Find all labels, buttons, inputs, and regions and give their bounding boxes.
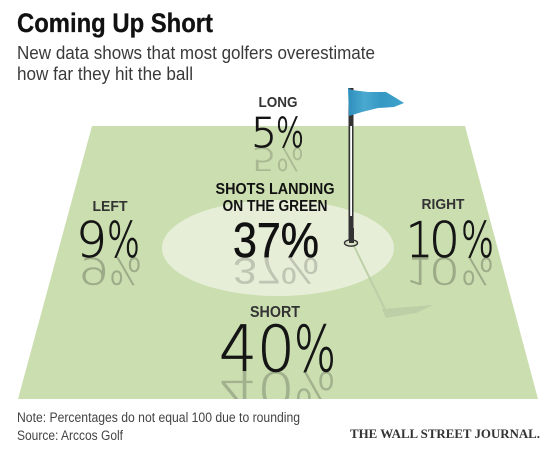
footnote: Note: Percentages do not equal 100 due to rounding [17, 410, 300, 425]
flag shadow [353, 246, 433, 318]
central green ellipse [162, 200, 394, 296]
label: left: 9 [76, 212, 107, 269]
title: Coming Up Short [17, 8, 213, 38]
icon: flag and pin [344, 88, 404, 246]
label: long: LONG [258, 94, 298, 111]
subtitle [17, 42, 375, 84]
label: right [406, 196, 494, 291]
label: right: % [461, 212, 494, 269]
label: shots landing on the green: 37% [233, 214, 319, 268]
footnote [17, 410, 300, 443]
label: long: 5 [251, 140, 277, 177]
label: shots landing on the green: ON THE GREEN [222, 198, 328, 215]
label: right: RIGHT [422, 196, 464, 213]
label: short: 40 [219, 360, 295, 415]
subtitle: how far they hit the ball [17, 63, 193, 84]
label: right: % [461, 249, 494, 291]
label: right: 1 [406, 249, 433, 291]
label: left: LEFT [92, 198, 128, 215]
panel: putting green [18, 126, 538, 399]
label: right: 1 [406, 212, 433, 269]
label: long: % [276, 109, 304, 157]
label: long: % [276, 140, 304, 177]
label: left: % [107, 212, 140, 269]
label: long [251, 94, 304, 177]
label: left [76, 198, 142, 291]
label: right: 0 [429, 212, 460, 269]
label: shots landing on the green: 37% [233, 250, 319, 290]
label: shots landing on the green [216, 181, 334, 290]
label: short: 40 [219, 313, 295, 386]
label: left: 9 [78, 249, 109, 291]
label: shots landing on the green: SHOTS LANDING [216, 181, 334, 198]
label: short: % [294, 313, 336, 386]
label: short: % [294, 360, 336, 415]
credit: the wall street journal: THE WALL STREET JOURNAL. [350, 426, 540, 441]
label: short: SHORT [250, 304, 300, 321]
footnote: Source: Arccos Golf [17, 428, 123, 443]
label: left: % [109, 249, 142, 291]
label: long: 5 [251, 109, 277, 157]
label: right: 0 [429, 249, 460, 291]
label: short [222, 306, 333, 399]
subtitle: New data shows that most golfers overestimate [17, 42, 375, 63]
